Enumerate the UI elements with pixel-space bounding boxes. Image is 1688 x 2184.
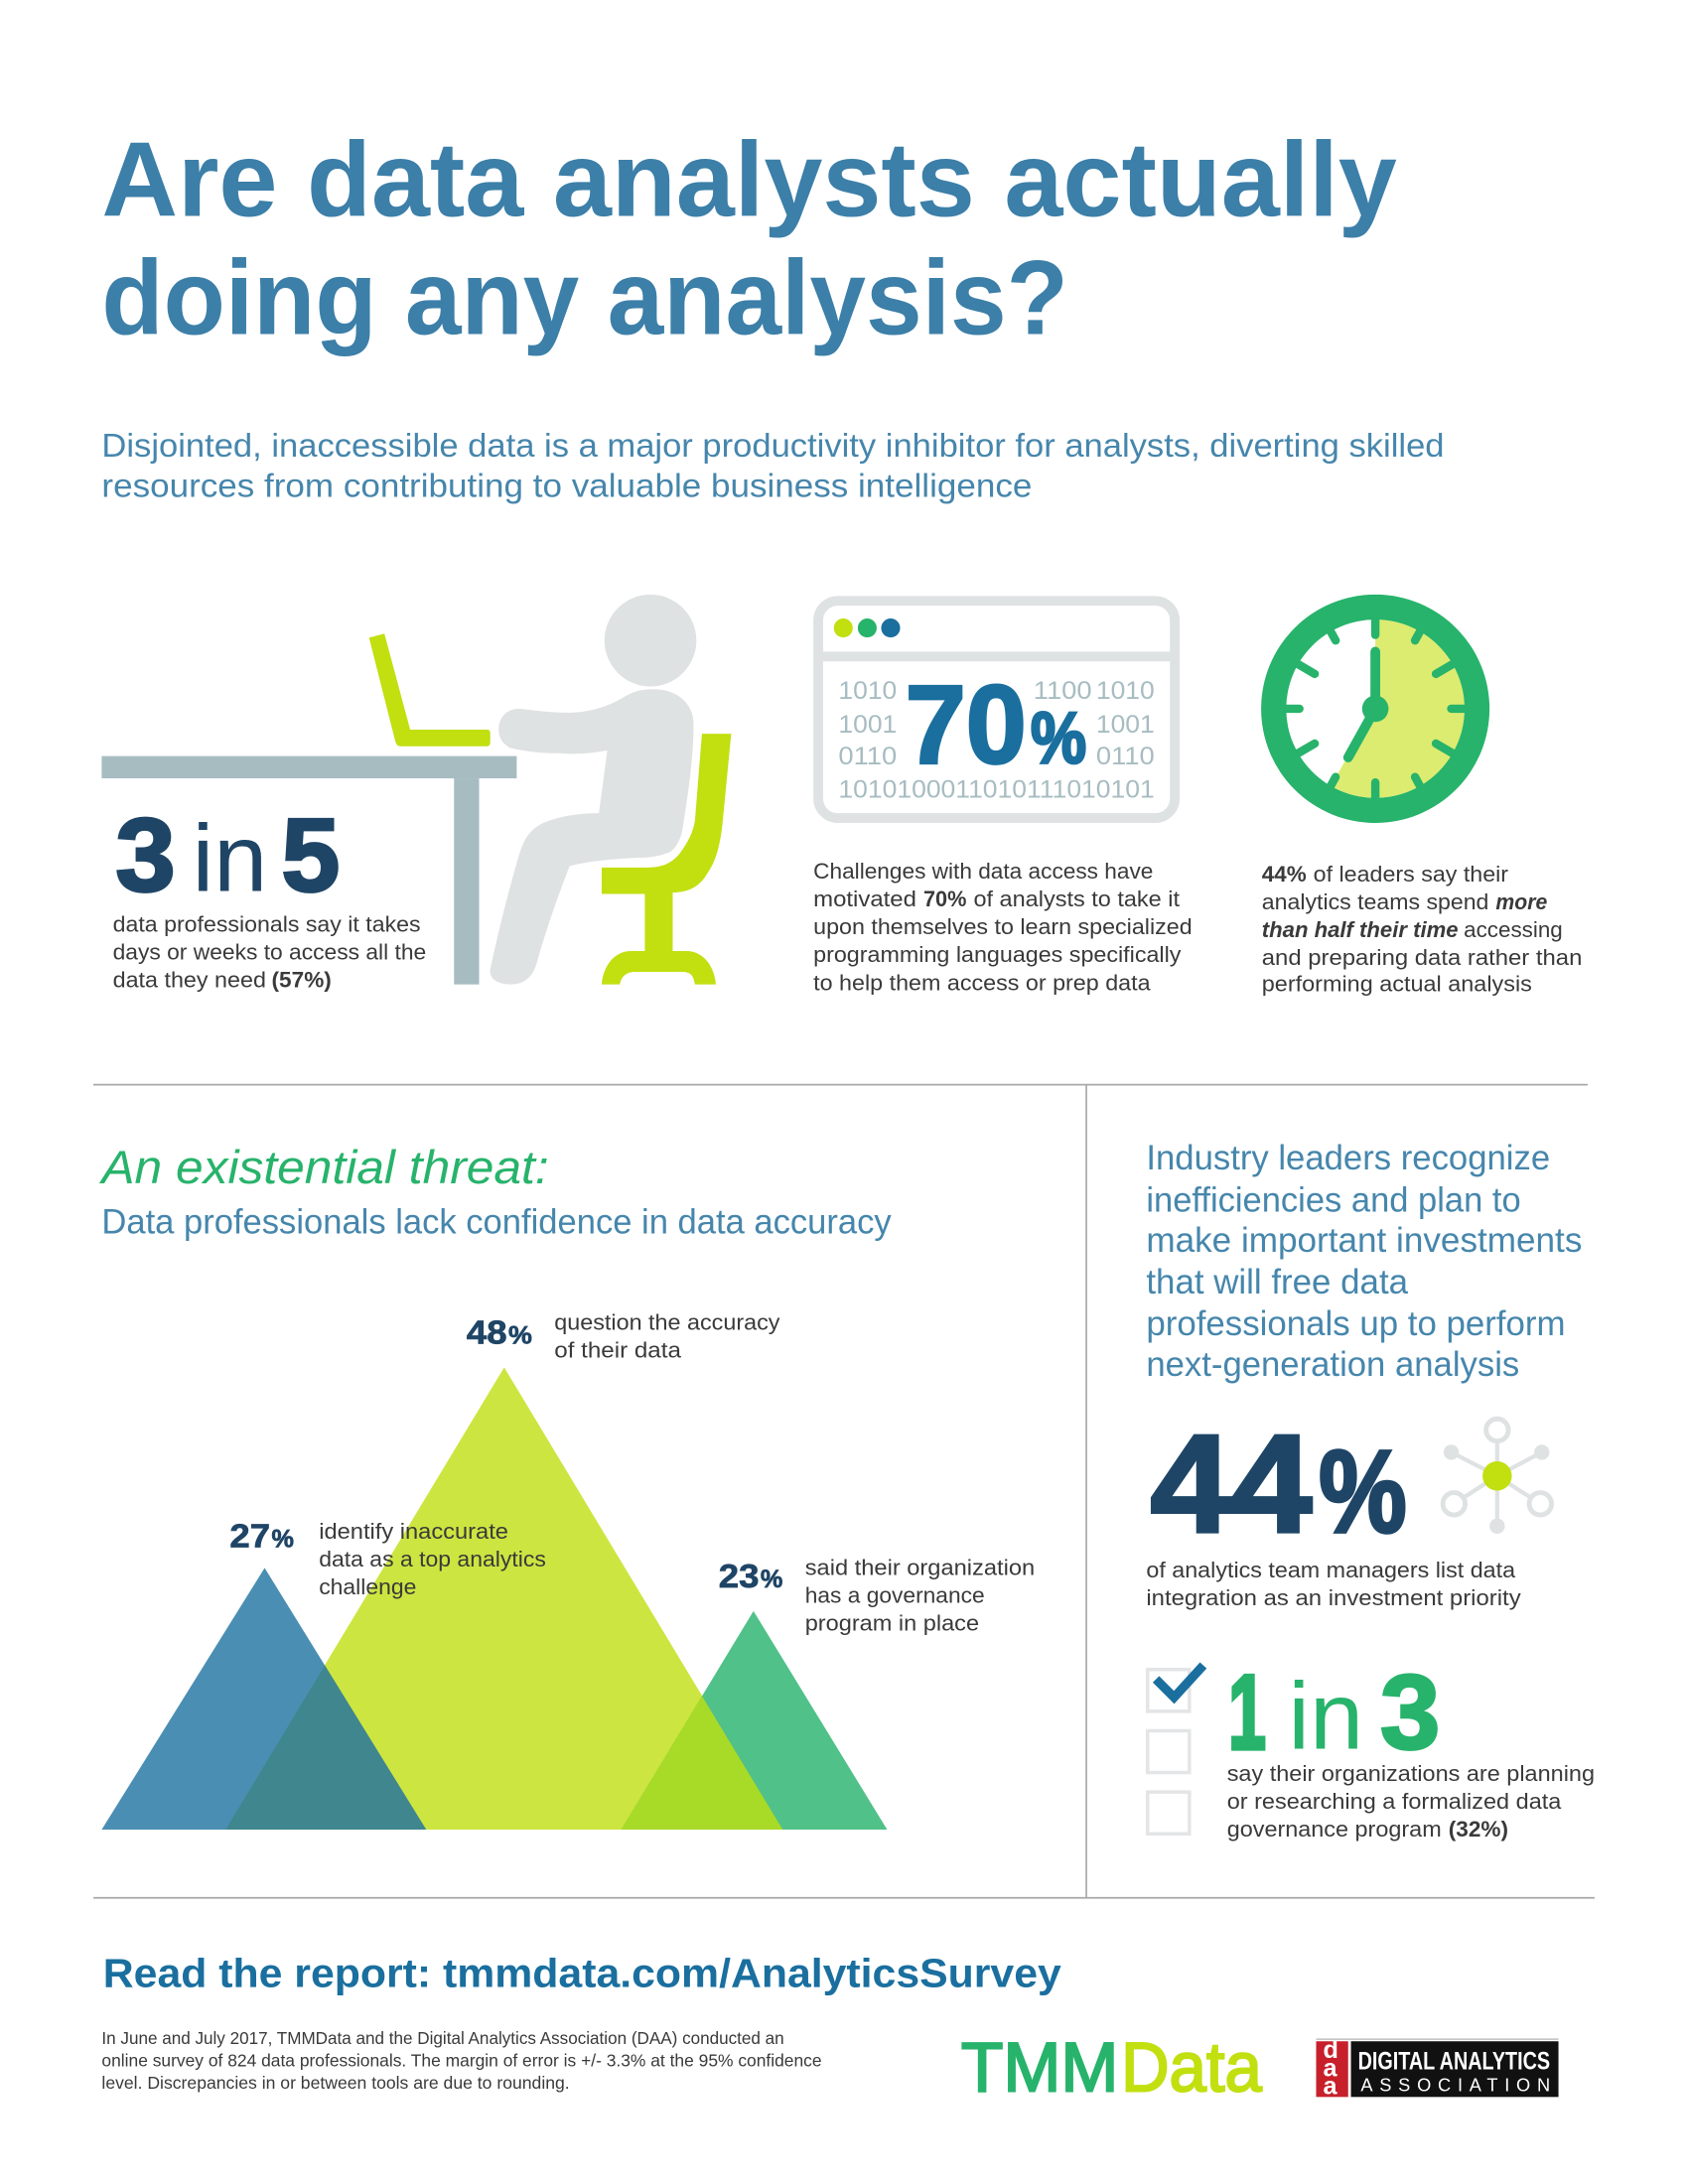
stat: 3 in 5: 5 xyxy=(281,798,340,914)
logo: Digital Analytics Association: a xyxy=(1323,2073,1337,2101)
stat: 70% xyxy=(906,662,1086,787)
stat: 27% xyxy=(229,1518,294,1555)
stat: 44% xyxy=(1151,1406,1407,1562)
text: 70% description xyxy=(813,859,1193,995)
heading: industry leaders: make important investments xyxy=(1146,1221,1582,1260)
binary digits: 1010100011010111010101 xyxy=(838,776,1155,804)
title xyxy=(101,120,1397,357)
text: 70% description: 70% xyxy=(923,887,966,911)
panel: 44% clock xyxy=(1261,595,1582,997)
text: 3 in 5 description: data professionals say it takes xyxy=(113,911,421,936)
text: 1 in 3 description: say their organizations are planning xyxy=(1227,1761,1595,1786)
binary digits: 0110 xyxy=(838,743,897,770)
text: 1 in 3 description: or researching a formalized data xyxy=(1227,1789,1562,1814)
stat: 44%: % xyxy=(1319,1426,1407,1557)
text: 44% leaders description: of leaders say their xyxy=(1314,862,1509,887)
text: 44% leaders description: than half their time xyxy=(1262,917,1459,942)
icon: chair xyxy=(602,734,731,985)
text: 44% description: integration as an investment priority xyxy=(1146,1585,1521,1610)
text: 1 in 3 description: (32%) xyxy=(1449,1817,1508,1842)
text: 48% label: question the accuracy xyxy=(554,1309,780,1334)
stat: 1 in 3: 1 xyxy=(1228,1654,1266,1772)
icon: desk xyxy=(101,756,516,985)
binary digits: 0110 xyxy=(1096,743,1155,770)
text: 70% description: Challenges with data access have xyxy=(813,859,1153,884)
text: 1 in 3 description xyxy=(1227,1761,1595,1842)
binary digits: 1100 xyxy=(1034,677,1092,705)
text: 44% leaders description: accessing xyxy=(1464,917,1563,942)
binary digits: 1010 xyxy=(1096,677,1155,705)
text: 3 in 5 description: (57%) xyxy=(272,967,332,992)
text: 44% leaders description: performing actual analysis xyxy=(1262,972,1532,997)
text: 70% description: of analysts to take it xyxy=(973,887,1181,911)
text: 48% label xyxy=(554,1309,780,1363)
call to action: read the report: Read the report: tmmdata.com/AnalyticsSurvey xyxy=(103,1951,1061,1996)
stat: 1 in 3: 3 xyxy=(1380,1654,1440,1772)
logo: Digital Analytics Association: a xyxy=(1323,2054,1337,2082)
panel: existential threat xyxy=(98,1142,1035,1830)
stat: 23%: 23 xyxy=(719,1559,759,1595)
stat: 27%: 27 xyxy=(229,1518,270,1555)
text: 44% description: of analytics team managers list data xyxy=(1146,1558,1516,1582)
stat: 48%: 48 xyxy=(467,1315,507,1352)
text: 70% description: upon themselves to learn specialized xyxy=(813,914,1193,939)
stat: 23%: % xyxy=(761,1566,782,1593)
text: 44% description xyxy=(1146,1558,1521,1610)
text: 27% label: data as a top analytics xyxy=(319,1547,546,1571)
icon: clock xyxy=(1261,595,1489,823)
stat: 23% xyxy=(719,1559,782,1595)
text: 44% leaders description: 44% xyxy=(1262,862,1307,887)
text: 70% description: motivated xyxy=(813,887,916,911)
subtitle xyxy=(101,428,1445,505)
logo: TMMData: Data xyxy=(1121,2029,1262,2107)
binary digits: 1001 xyxy=(1096,711,1155,739)
binary digits: 1001 xyxy=(838,711,897,739)
heading: industry leaders: inefficiencies and plan to xyxy=(1146,1180,1521,1219)
stat: 1 in 3 xyxy=(1228,1654,1440,1772)
text: 3 in 5 description: days or weeks to access all the xyxy=(113,939,426,964)
logo: Digital Analytics Association: ASSOCIATION xyxy=(1360,2075,1550,2096)
text: 27% label: identify inaccurate xyxy=(319,1519,508,1544)
chart: overlapping triangles xyxy=(101,1367,887,1830)
text: 48% label: of their data xyxy=(554,1338,681,1363)
binary digits xyxy=(838,677,1155,804)
icon: browser window xyxy=(817,601,1176,818)
panel: 70% browser window xyxy=(813,601,1193,995)
text: 27% label xyxy=(319,1519,546,1599)
text: 23% label: has a governance xyxy=(805,1582,985,1607)
stat: 70%: % xyxy=(1031,699,1086,779)
heading: industry leaders: that will free data xyxy=(1146,1263,1409,1301)
stat: 48%: % xyxy=(508,1322,532,1350)
text: 27% label: challenge xyxy=(319,1574,416,1599)
icon: laptop xyxy=(369,633,491,747)
stat: 3 in 5: 3 xyxy=(115,798,176,914)
icon: network hub xyxy=(1443,1419,1552,1534)
title: Are data analysts actually xyxy=(101,120,1397,238)
methodology note: online survey of 824 data professionals. The margin of error is +/- 3.3% at the 95% confidence xyxy=(101,2050,822,2070)
icon: checkboxes xyxy=(1148,1666,1203,1834)
text: 44% leaders description: and preparing data rather than xyxy=(1262,945,1582,970)
logo: TMMData: TMM xyxy=(961,2029,1118,2107)
text: 23% label: program in place xyxy=(805,1610,979,1635)
text: 3 in 5 description xyxy=(113,911,426,992)
stat: 3 in 5 xyxy=(115,798,340,914)
panel: industry leaders xyxy=(1146,1139,1595,1842)
stat: 44%: 44 xyxy=(1151,1406,1312,1562)
title: doing any analysis? xyxy=(101,239,1068,357)
stat: 3 in 5: in xyxy=(193,807,267,912)
subtitle: Disjointed, inaccessible data is a major productivity inhibitor for analysts, diverting skilled xyxy=(101,428,1445,465)
text: 23% label: said their organization xyxy=(805,1555,1035,1579)
heading: industry leaders: next-generation analysis xyxy=(1146,1345,1519,1384)
text: 70% description: to help them access or prep data xyxy=(813,970,1151,995)
logo: Digital Analytics Association: DIGITAL ANALYTICS xyxy=(1358,2047,1550,2075)
methodology note: In June and July 2017, TMMData and the Digital Analytics Association (DAA) conducted an xyxy=(101,2028,784,2048)
text: 1 in 3 description: governance program xyxy=(1227,1817,1442,1842)
logo: Digital Analytics Association xyxy=(1316,2036,1559,2101)
panel: 3 in 5 desk worker xyxy=(101,595,731,992)
methodology note xyxy=(101,2028,822,2093)
stat: 1 in 3: in xyxy=(1288,1665,1363,1770)
heading: an existential threat: An existential threat: xyxy=(98,1142,549,1194)
subtitle: resources from contributing to valuable business intelligence xyxy=(101,469,1032,505)
heading: industry leaders xyxy=(1146,1139,1582,1384)
text: 23% label xyxy=(805,1555,1035,1635)
methodology note: level. Discrepancies in or between tools are due to rounding. xyxy=(101,2073,570,2093)
binary digits: 1010 xyxy=(838,677,897,705)
heading: industry leaders: professionals up to perform xyxy=(1146,1304,1566,1343)
logo: Digital Analytics Association: d xyxy=(1323,2036,1338,2064)
text: 44% leaders description: more xyxy=(1495,889,1547,914)
text: 3 in 5 description: data they need xyxy=(113,967,266,992)
text: 70% description: programming languages specifically xyxy=(813,942,1182,967)
text: 44% leaders description xyxy=(1262,862,1582,997)
logo: TMMData xyxy=(961,2029,1262,2107)
icon: person xyxy=(491,595,696,985)
stat: 48% xyxy=(467,1315,532,1352)
text: 44% leaders description: analytics teams spend xyxy=(1262,889,1488,914)
stat: 70%: 70 xyxy=(906,662,1027,787)
subheading: Data professionals lack confidence in data accuracy xyxy=(101,1203,892,1242)
stat: 27%: % xyxy=(272,1525,294,1553)
heading: industry leaders: Industry leaders recognize xyxy=(1146,1139,1550,1177)
